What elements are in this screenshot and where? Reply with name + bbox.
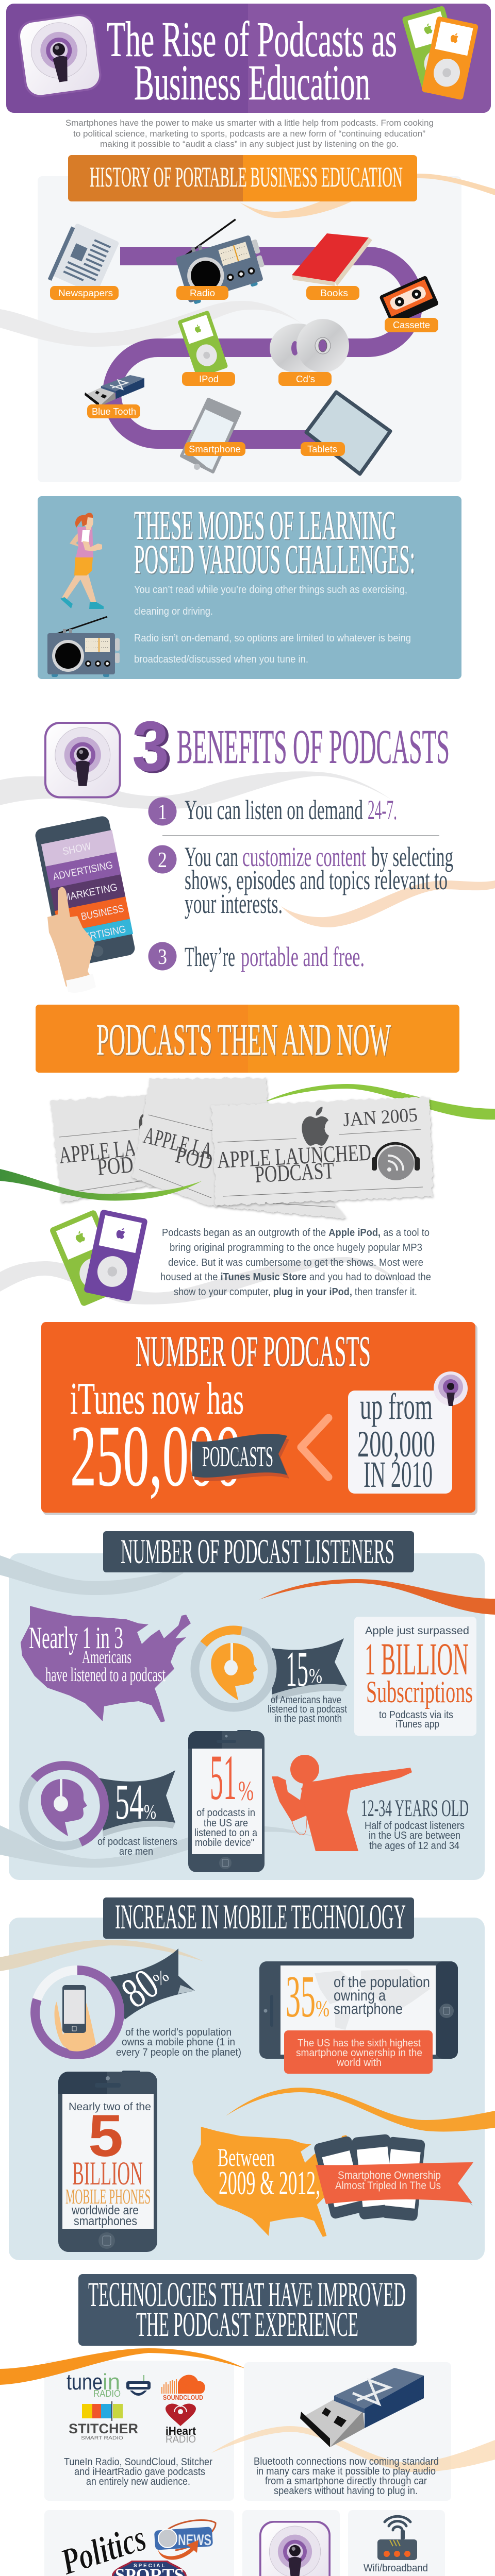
caption: apps: TuneIn Radio, SoundCloud, Stitcher bbox=[64, 2456, 212, 2468]
icon: rss with headphones bbox=[372, 1143, 420, 1180]
benefit 3: They’re bbox=[185, 941, 235, 972]
caption: bluetooth bbox=[254, 2456, 439, 2497]
icon: green and purple iPods bbox=[49, 1209, 148, 1307]
stat: 80 percent: every 7 people on the planet) bbox=[116, 2047, 241, 2058]
labels: timeline: Smartphone bbox=[189, 444, 241, 454]
stat: 51 percent phone: the US are bbox=[204, 1818, 248, 1829]
stat: 5 billion phone: smartphones bbox=[74, 2214, 137, 2228]
benefit 3: portable and free. bbox=[241, 941, 365, 972]
challenges text: broadcasted/discussed when you tune in. bbox=[134, 654, 308, 665]
stat: 80 percent: owns a mobile phone (1 in bbox=[122, 2037, 235, 2048]
icon: newspaper bbox=[48, 222, 120, 300]
card: apple podcast app bbox=[242, 2510, 340, 2576]
icon: smartphone bbox=[180, 398, 241, 472]
stat: smartphone ownership tripled: Between bbox=[218, 2143, 275, 2172]
benefit 1 bbox=[148, 794, 397, 825]
labels: timeline: Radio bbox=[190, 288, 215, 298]
challenges text: Radio isn’t on-demand, so options are limited to whatever is being bbox=[134, 633, 411, 644]
stat: 54 percent: are men bbox=[119, 1846, 153, 1857]
stat: 15 percent: % bbox=[309, 1664, 322, 1687]
labels: timeline: Blue Tooth bbox=[92, 406, 136, 417]
ribbon: smartphone ownership bbox=[316, 2162, 473, 2206]
stat: 35 percent tablet: owning a bbox=[334, 1987, 386, 2004]
icon: phone with hand: MARKETING bbox=[61, 882, 119, 904]
stat: 51 percent phone bbox=[188, 1730, 265, 1872]
stat: 35 percent tablet: % bbox=[316, 1996, 329, 2021]
panel: increase in mobile technology bbox=[0, 1897, 495, 2260]
logo: special sports: SPECIAL bbox=[134, 2563, 166, 2569]
caption: apps: an entirely new audience. bbox=[86, 2476, 190, 2487]
ribbon: podcasts: PODCASTS bbox=[202, 1441, 273, 1473]
logo: soundcloud bbox=[162, 2375, 205, 2401]
icon: radio small bbox=[47, 617, 120, 677]
title bbox=[107, 12, 397, 111]
stat: 5 billion phone: MOBILE PHONES bbox=[65, 2184, 151, 2208]
stat: 80 percent: of the world’s population bbox=[125, 2027, 232, 2038]
caption: apps: and iHeartRadio gave podcasts bbox=[74, 2466, 205, 2478]
icon: cassette bbox=[379, 275, 439, 326]
logo: tunein radio: RADIO bbox=[93, 2388, 121, 2399]
heading: challenges bbox=[134, 503, 415, 582]
caption: bluetooth: Bluetooth connections now coming standard bbox=[254, 2456, 439, 2467]
caption: apps bbox=[64, 2456, 212, 2487]
logo: stitcher bbox=[69, 2401, 138, 2441]
panel: challenges bbox=[38, 496, 461, 679]
text: podcast history: Podcasts began as an outgrowth of the Apple iPod, as a tool to bbox=[162, 1227, 430, 1239]
icon: runner bbox=[60, 513, 104, 609]
stat: 12-34 years old: the ages of 12 and 34 bbox=[369, 1840, 459, 1852]
logo: stitcher: STITCHER bbox=[69, 2421, 138, 2436]
stat: 54 percent: % bbox=[144, 1800, 156, 1823]
benefit 2: customize content bbox=[242, 841, 366, 872]
ribbon: smartphone ownership: Smartphone Ownership bbox=[338, 2170, 441, 2181]
stat: 5 billion phone bbox=[58, 2071, 157, 2252]
icon: less-than arrow bbox=[301, 1418, 328, 1477]
stat: 250,000: iTunes now has bbox=[70, 1374, 244, 1424]
stat: 80 percent: % bbox=[150, 1966, 173, 1990]
card: wifi and broadcast tools bbox=[348, 2510, 445, 2576]
header banner bbox=[6, 4, 491, 113]
icon: phone with hand: ADVERTISING bbox=[52, 859, 114, 883]
stat: 15 percent: 15 bbox=[286, 1641, 308, 1697]
caption: bluetooth: in many cars make it possible to play audio bbox=[256, 2466, 436, 2477]
icon: phone with hand: ADVERTISING bbox=[65, 924, 127, 947]
callout: 1 billion subscriptions: to Podcasts via its bbox=[379, 1709, 453, 1721]
icon: podcast app bbox=[259, 2521, 331, 2576]
icon: green and orange iPods bbox=[402, 6, 478, 100]
callout: 1 billion subscriptions: Apple just surpassed bbox=[365, 1625, 469, 1637]
callout: sixth highest: The US has the sixth highest bbox=[298, 2038, 421, 2049]
stat: 5 billion phone: worldwide are bbox=[71, 2204, 139, 2217]
panel: number of podcasts bbox=[41, 1322, 477, 1515]
stat: 12-34 years old: in the US are between bbox=[369, 1830, 460, 1841]
divider bbox=[162, 835, 439, 836]
labels: timeline: IPod bbox=[199, 374, 219, 384]
map: nearly 1 in 3 bbox=[21, 1606, 191, 1722]
big number 3: 3 bbox=[132, 707, 169, 786]
swoosh: green right bbox=[260, 1084, 495, 1120]
text: podcast history: show to your computer, plug in your iPod, then transfer it. bbox=[174, 1286, 417, 1298]
stat: 15 percent bbox=[195, 1630, 347, 1724]
newspaper clippings bbox=[0, 1078, 433, 1219]
clipping: left bbox=[51, 1095, 157, 1202]
icon: iPod bbox=[177, 310, 228, 378]
callout: 1 billion subscriptions bbox=[354, 1617, 476, 1736]
world map watermark bbox=[315, 1969, 431, 2030]
stat: 15 percent: listened to a podcast bbox=[268, 1704, 347, 1715]
stat: 54 percent bbox=[24, 1766, 177, 1857]
text: podcast history: bring original programming to the once hugely popular MP3 bbox=[170, 1242, 422, 1253]
swoosh: peach benefits bbox=[281, 880, 495, 927]
stat: 12-34 years old: Half of podcast listeners bbox=[365, 1820, 465, 1832]
clipping: front bbox=[211, 1097, 433, 1206]
stat: 5 billion phone: BILLION bbox=[72, 2155, 143, 2192]
stat: 80 percent: 80 bbox=[113, 1960, 167, 2018]
intro text: to political science, marketing to sports, podcasts are a new form of “continuing education” bbox=[73, 129, 425, 139]
ribbon: smartphone ownership: Almost Tripled In The Us bbox=[335, 2180, 441, 2192]
callout: 1 billion subscriptions: iTunes app bbox=[395, 1719, 439, 1730]
logo: tunein radio: in bbox=[103, 2369, 120, 2395]
clipping: middle bbox=[133, 1078, 347, 1219]
swoosh: gray benefits bbox=[0, 771, 391, 809]
icon: tablet bbox=[306, 392, 390, 474]
caption: bluetooth: from a smartphone directly through car bbox=[265, 2476, 427, 2487]
icon: phone with hand: BUSINESS bbox=[80, 903, 125, 923]
icon: wifi router bbox=[377, 2516, 417, 2560]
logo: soundcloud: SOUNDCLOUD bbox=[163, 2394, 203, 2401]
text: podcast history: device. But it was cumbersome to get the shows. Most were bbox=[168, 1257, 423, 1268]
challenges text: cleaning or driving. bbox=[134, 606, 213, 617]
stat: smartphone ownership tripled bbox=[192, 2127, 473, 2237]
icon: radio bbox=[170, 215, 270, 306]
challenges text bbox=[134, 584, 411, 665]
icon: three phones bbox=[313, 2134, 425, 2221]
callout: sixth highest: smartphone ownership in the bbox=[296, 2047, 422, 2059]
stat: 54 percent: 54 bbox=[115, 1774, 144, 1830]
stat: 250,000 bbox=[70, 1374, 244, 1504]
heading: technologies bbox=[78, 2274, 417, 2346]
icon: bluetooth dongle bbox=[300, 2368, 424, 2447]
caption: bluetooth: speakers without having to plug in. bbox=[274, 2485, 418, 2497]
card: bluetooth bbox=[211, 2362, 495, 2501]
map: nearly 1 in 3: Nearly 1 in 3 bbox=[29, 1621, 123, 1655]
clipping: middle: APPLE LA bbox=[141, 1122, 215, 1164]
labels: timeline: Cassette bbox=[393, 320, 430, 330]
swoosh: green left bbox=[0, 1169, 202, 1200]
callout: sixth highest bbox=[284, 2030, 433, 2074]
section: 3 benefits of podcasts bbox=[34, 707, 453, 993]
stat: 5 billion phone: Nearly two of the bbox=[69, 2101, 151, 2113]
labels: timeline: Newspapers bbox=[58, 288, 113, 298]
benefit 1: You can listen on demand bbox=[185, 794, 363, 825]
stat: 54 percent: of podcast listeners bbox=[97, 1836, 177, 1848]
clipping: middle: POD bbox=[173, 1141, 215, 1175]
stat: 15 percent: of Americans have bbox=[271, 1694, 341, 1706]
stat: smartphone ownership tripled: 2009 & 2012, bbox=[219, 2164, 320, 2202]
labels: timeline: Books bbox=[320, 288, 348, 298]
ribbon: podcasts bbox=[192, 1434, 289, 1481]
icon: podcast app bbox=[16, 12, 103, 99]
stat: 5 billion phone: 5 bbox=[88, 2103, 123, 2169]
icon: podcast circle bbox=[434, 1371, 468, 1406]
panel: history of portable business education bbox=[0, 155, 495, 482]
benefit 1: 1 bbox=[158, 801, 167, 824]
stat: 15 percent: in the past month bbox=[275, 1713, 342, 1724]
logo: tunein radio: tune bbox=[67, 2369, 103, 2395]
intro text bbox=[65, 118, 434, 149]
timeline track bbox=[112, 256, 414, 439]
heading: history bbox=[68, 155, 417, 201]
map: nearly 1 in 3: have listened to a podcast bbox=[45, 1664, 166, 1686]
icon: bluetooth dongle bbox=[85, 375, 144, 406]
logo: iheart radio bbox=[166, 2404, 196, 2445]
stat: 51 percent phone: mobile device" bbox=[195, 1837, 254, 1849]
stat: 12-34 years old bbox=[272, 1755, 469, 1852]
clipping: front: JAN 2005 bbox=[342, 1104, 418, 1131]
benefit 3: 3 bbox=[158, 945, 167, 969]
labels: timeline bbox=[50, 286, 438, 456]
logo: iheart radio: iHeart bbox=[166, 2425, 196, 2437]
card: popular categories bbox=[44, 2510, 234, 2576]
intro text: making it possible to “audit a class” in any subject just by listening on the go. bbox=[100, 139, 399, 149]
logo: stitcher: SMART RADIO bbox=[81, 2435, 123, 2441]
stat: 51 percent phone: of podcasts in bbox=[196, 1807, 255, 1819]
big number 3: 3 bbox=[134, 708, 172, 788]
benefit 3 bbox=[148, 941, 365, 972]
text: podcast history: housed at the iTunes Music Store and you had to download the bbox=[160, 1272, 431, 1283]
icon: apple logo bbox=[302, 1107, 329, 1146]
benefit 2: You can bbox=[185, 841, 238, 872]
stat: 35 percent tablet: of the population bbox=[334, 1974, 430, 1991]
clipping: front: PODCAST bbox=[254, 1157, 335, 1188]
logo: news: NEWS bbox=[178, 2532, 211, 2549]
intro text: Smartphones have the power to make us smarter with a little help from podcasts. From cooking bbox=[65, 118, 434, 128]
stat: 35 percent tablet bbox=[259, 1961, 458, 2074]
stat: 51 percent phone: 51 bbox=[210, 1742, 237, 1814]
callout: up from 200,000: up from bbox=[360, 1386, 433, 1427]
icon: phone with hand: SHOW bbox=[61, 841, 92, 858]
logo: news bbox=[154, 2520, 216, 2560]
benefit 2 bbox=[148, 841, 453, 919]
benefit 2: your interests. bbox=[185, 888, 283, 919]
icon: podcast app bbox=[44, 722, 121, 799]
benefit 2: 2 bbox=[158, 849, 167, 872]
icon: phone with hand bbox=[34, 815, 137, 993]
icon: book bbox=[292, 233, 372, 286]
icon: CDs bbox=[270, 319, 349, 373]
card: listening apps bbox=[0, 2348, 246, 2501]
card: wifi and broadcast tools: Wifi/broadband bbox=[364, 2563, 428, 2574]
heading: podcasts then and now bbox=[36, 1005, 459, 1073]
panel: number of podcast listeners bbox=[0, 1531, 495, 1880]
clipping: front: APPLE LAUNCHED bbox=[217, 1139, 372, 1173]
labels: timeline: Tablets bbox=[307, 444, 337, 454]
labels: timeline: Cd’s bbox=[296, 374, 315, 384]
benefit 1: 24-7. bbox=[368, 794, 397, 825]
map: nearly 1 in 3: Americans bbox=[82, 1647, 131, 1667]
clipping: left: APPLE LA bbox=[58, 1134, 137, 1168]
swoosh: gray then and now bbox=[0, 1257, 404, 1304]
callout: sixth highest: world with bbox=[336, 2057, 382, 2069]
challenges text: You can’t read while you’re doing other things such as exercising, bbox=[134, 584, 407, 596]
stat: 51 percent phone: listened to on a bbox=[194, 1827, 258, 1839]
logo: tunein radio bbox=[67, 2369, 151, 2399]
clipping: left: POD bbox=[96, 1151, 135, 1180]
stat: 35 percent tablet: smartphone bbox=[334, 2001, 403, 2018]
stat: 51 percent phone: % bbox=[238, 1775, 254, 1806]
callout: up from 200,000 bbox=[348, 1386, 452, 1495]
callout: up from 200,000: 200,000 bbox=[357, 1423, 435, 1465]
stat: 250,000: 250,000 bbox=[70, 1408, 241, 1504]
stat: 80 percent bbox=[35, 1948, 241, 2058]
logo: iheart radio: RADIO bbox=[166, 2434, 196, 2445]
callout: up from 200,000: IN 2010 bbox=[364, 1454, 433, 1495]
text: podcast history bbox=[160, 1227, 431, 1298]
stat: 35 percent tablet: 35 bbox=[286, 1964, 316, 2030]
